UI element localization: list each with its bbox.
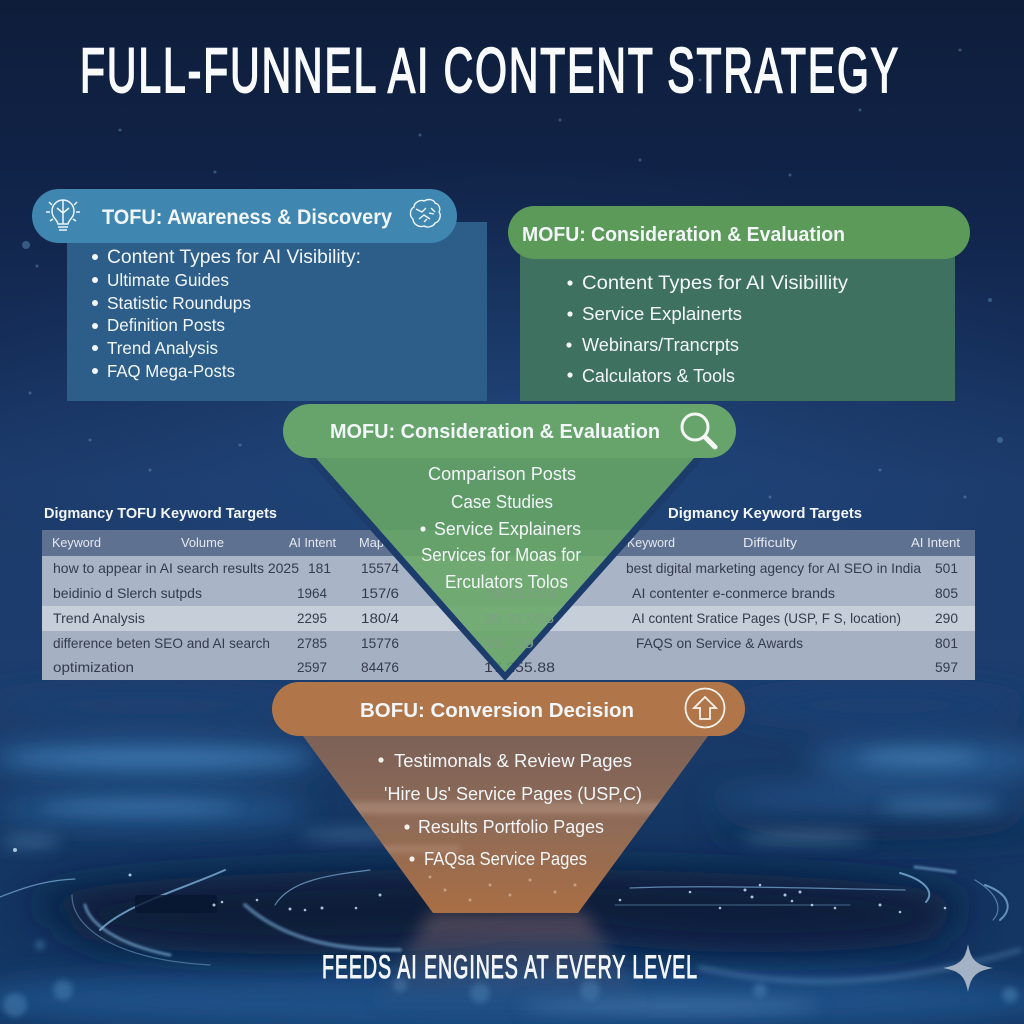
left table: how to appear in AI search results 2025	[53, 560, 299, 576]
right table: 290	[935, 610, 958, 626]
left table: 180/4	[361, 610, 399, 626]
TOFU content list: Statistic Roundups	[107, 293, 251, 313]
MOFU body panel	[520, 243, 955, 401]
MOFU header pill	[508, 206, 970, 259]
right table: AI Intent	[911, 535, 960, 550]
BOFU list	[378, 751, 642, 869]
left table: 84476	[361, 659, 399, 675]
BOFU heading: BOFU: Conversion Decision	[360, 700, 634, 722]
right table: FAQS on Service & Awards	[636, 635, 803, 651]
left table: Keyword	[52, 535, 101, 550]
right table: AI content Sratice Pages (USP, F S, location)	[632, 610, 901, 626]
BOFU list: Results Portfolio Pages	[418, 817, 604, 837]
MOFU funnel list: Service Explainers	[434, 519, 581, 539]
right table: 501	[935, 560, 958, 576]
trapezoid light streak and specks	[350, 800, 660, 902]
BOFU trapezoid	[303, 736, 708, 913]
left table: Trend Analysis	[53, 610, 145, 626]
right table: 597	[935, 659, 958, 675]
MOFU funnel list: Services for Moas for	[421, 545, 581, 565]
trapezoid reflection	[370, 913, 650, 1010]
faint numbers in funnel: 29 317/26	[484, 611, 554, 626]
left table: 157/6	[361, 585, 399, 601]
left table: Volume	[181, 535, 224, 550]
BOFU list: FAQsa Service Pages	[424, 849, 587, 869]
left table: beidinio d Slerch sutpds	[53, 585, 202, 601]
panel: BOFU	[272, 682, 745, 913]
MOFU funnel list: Case Studies	[451, 492, 553, 512]
funnel triangle	[316, 458, 694, 672]
MOFU content list	[566, 273, 849, 386]
TOFU content list: Definition Posts	[107, 315, 225, 335]
keyword tables band	[42, 530, 975, 680]
left table: 17 255.88	[484, 659, 555, 675]
MOFU heading: MOFU: Consideration & Evaluation	[522, 224, 845, 246]
left table: 1964	[297, 585, 327, 601]
MOFU content list: Calculators & Tools	[582, 366, 735, 386]
left table: 15574	[361, 560, 399, 576]
left table	[52, 535, 555, 675]
icon: sparkle	[943, 944, 993, 992]
left table: optimization	[53, 659, 134, 675]
left table heading: Digmancy TOFU Keyword Targets	[44, 505, 277, 522]
left table: AI Intent	[289, 535, 336, 550]
faint numbers in funnel	[484, 586, 556, 651]
TOFU content list	[92, 247, 361, 381]
left table: 15776	[361, 635, 399, 651]
MOFU content list: Service Explainerts	[582, 304, 742, 324]
panel: MOFU top	[508, 206, 970, 401]
right table: 801	[935, 635, 958, 651]
left table: 181	[308, 560, 331, 576]
footer tagline: FEEDS AI ENGINES AT EVERY LEVEL	[322, 949, 698, 985]
faint numbers in funnel: 20. 29	[484, 636, 534, 651]
MOFU funnel heading: MOFU: Consideration & Evaluation	[330, 421, 660, 443]
TOFU content list: Trend Analysis	[107, 338, 218, 358]
left table: Map	[359, 535, 384, 550]
icon: brain	[410, 200, 440, 227]
MOFU funnel list	[420, 464, 581, 592]
icon: up arrow in circle	[686, 688, 724, 728]
BOFU header pill	[272, 682, 745, 736]
TOFU content list: Ultimate Guides	[107, 270, 229, 290]
MOFU content list: Webinars/Trancrpts	[582, 335, 739, 355]
TOFU content list: Content Types for AI Visibility:	[107, 247, 361, 268]
funnel outline band	[306, 458, 704, 681]
left table: 2295	[297, 610, 327, 626]
right table: best digital marketing agency for AI SEO in India	[626, 560, 921, 576]
BOFU list: Testimonals & Review Pages	[394, 751, 632, 771]
TOFU content list: FAQ Mega-Posts	[107, 361, 235, 381]
right table: Difficulty	[743, 535, 798, 550]
left table: difference beten SEO and AI search	[53, 635, 270, 651]
MOFU content list: Content Types for AI Visibillity	[582, 273, 849, 294]
BOFU list: 'Hire Us' Service Pages (USP,C)	[384, 784, 642, 804]
right table heading: Digmancy Keyword Targets	[668, 505, 862, 522]
panel: TOFU	[32, 189, 487, 401]
icon: lightbulb	[46, 200, 80, 230]
MOFU funnel list: Comparison Posts	[428, 464, 576, 484]
right table: AI contenter e-conmerce brands	[632, 585, 835, 601]
TOFU heading: TOFU: Awareness & Discovery	[102, 206, 392, 229]
TOFU header pill	[32, 189, 457, 243]
left table: 2785	[297, 635, 327, 651]
right table	[626, 535, 960, 675]
TOFU body panel	[67, 222, 487, 401]
icon: magnifier	[682, 414, 715, 447]
right table: 805	[935, 585, 958, 601]
MOFU funnel pill	[283, 404, 736, 458]
right table: Keyword	[627, 535, 675, 550]
panel: MOFU funnel	[283, 404, 736, 681]
left table: 2597	[297, 659, 327, 675]
MOFU funnel list: Erculators Tolos	[445, 572, 568, 592]
faint numbers in funnel: 28 117/23	[486, 586, 556, 601]
